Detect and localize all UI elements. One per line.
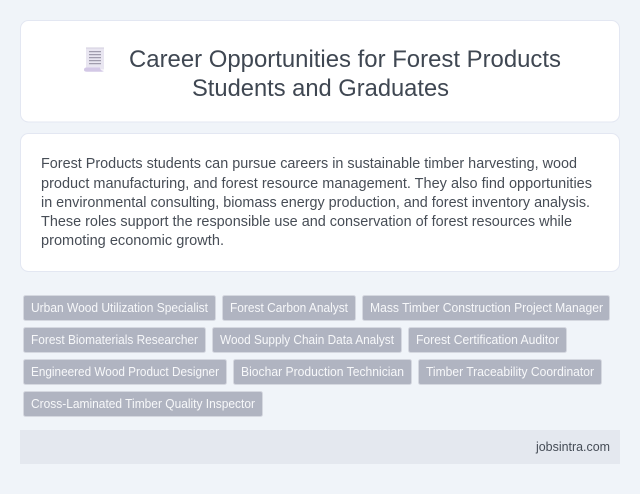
tag: Forest Certification Auditor xyxy=(408,328,566,352)
tag: Forest Certification Auditor: Forest Certification Auditor xyxy=(416,333,559,347)
title: Career Opportunities for Forest Products xyxy=(129,46,561,73)
description text: product manufacturing, and forest resource management. They also find opportunities xyxy=(41,175,592,192)
tag: Forest Carbon Analyst: Forest Carbon Analyst xyxy=(230,301,348,315)
tag: Mass Timber Construction Project Manager: Mass Timber Construction Project Manager xyxy=(370,301,603,315)
description text: promoting economic growth. xyxy=(41,232,224,249)
icon: paper scroll document xyxy=(84,48,104,72)
description text: These roles support the responsible use and conservation of forest resources while xyxy=(41,213,572,230)
description text: in environmental consulting, biomass energy production, and forest inventory analysis. xyxy=(41,194,590,211)
tag: Wood Supply Chain Data Analyst xyxy=(212,328,402,352)
job role tags xyxy=(24,296,610,416)
tag: Wood Supply Chain Data Analyst: Wood Supply Chain Data Analyst xyxy=(220,333,394,347)
description text xyxy=(41,155,592,249)
footer bar xyxy=(20,430,620,464)
tag: Engineered Wood Product Designer: Engineered Wood Product Designer xyxy=(31,365,219,379)
tag: Urban Wood Utilization Specialist xyxy=(24,296,216,320)
tag: Urban Wood Utilization Specialist: Urban Wood Utilization Specialist xyxy=(31,301,208,315)
tag: Timber Traceability Coordinator: Timber Traceability Coordinator xyxy=(426,365,594,379)
description text: Forest Products students can pursue careers in sustainable timber harvesting, wood xyxy=(41,155,577,172)
tag: Biochar Production Technician xyxy=(234,360,412,384)
title xyxy=(129,46,561,102)
tag: Timber Traceability Coordinator xyxy=(418,360,602,384)
tag: Cross-Laminated Timber Quality Inspector xyxy=(24,392,262,416)
title: Students and Graduates xyxy=(192,75,449,102)
tag: Forest Carbon Analyst xyxy=(222,296,356,320)
tag: Engineered Wood Product Designer xyxy=(24,360,226,384)
tag: Mass Timber Construction Project Manager xyxy=(362,296,610,320)
panel: description card xyxy=(20,134,620,272)
tag: Biochar Production Technician: Biochar Production Technician xyxy=(241,365,404,379)
panel: header card xyxy=(20,20,620,122)
tag: Cross-Laminated Timber Quality Inspector: Cross-Laminated Timber Quality Inspector xyxy=(31,397,255,411)
footer site name: jobsintra.com xyxy=(535,440,610,454)
tag: Forest Biomaterials Researcher xyxy=(24,328,206,352)
tag: Forest Biomaterials Researcher: Forest Biomaterials Researcher xyxy=(31,333,198,347)
